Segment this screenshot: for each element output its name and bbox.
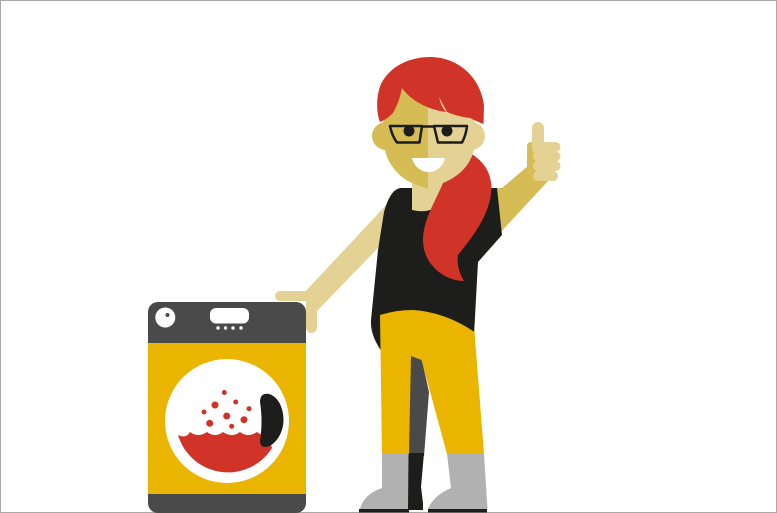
person	[275, 57, 560, 512]
ears	[372, 122, 485, 150]
water	[178, 432, 272, 472]
top	[371, 188, 502, 352]
bubbles	[202, 390, 252, 429]
hair	[377, 57, 484, 124]
machine display	[210, 308, 249, 330]
neck	[412, 175, 445, 211]
near arm resting on machine	[275, 202, 389, 333]
trousers	[380, 310, 484, 454]
back leg	[408, 354, 429, 456]
smile	[412, 158, 445, 172]
far arm raised with thumbs up	[497, 122, 560, 234]
eyes	[404, 126, 452, 136]
machine dial	[155, 308, 175, 328]
back boot	[408, 453, 424, 510]
door handle	[260, 394, 284, 447]
glasses	[390, 126, 467, 142]
machine drum	[165, 359, 289, 483]
face	[383, 80, 475, 189]
washing machine	[148, 302, 306, 513]
soles	[359, 509, 487, 512]
boots	[360, 454, 488, 509]
ponytail	[423, 153, 492, 281]
